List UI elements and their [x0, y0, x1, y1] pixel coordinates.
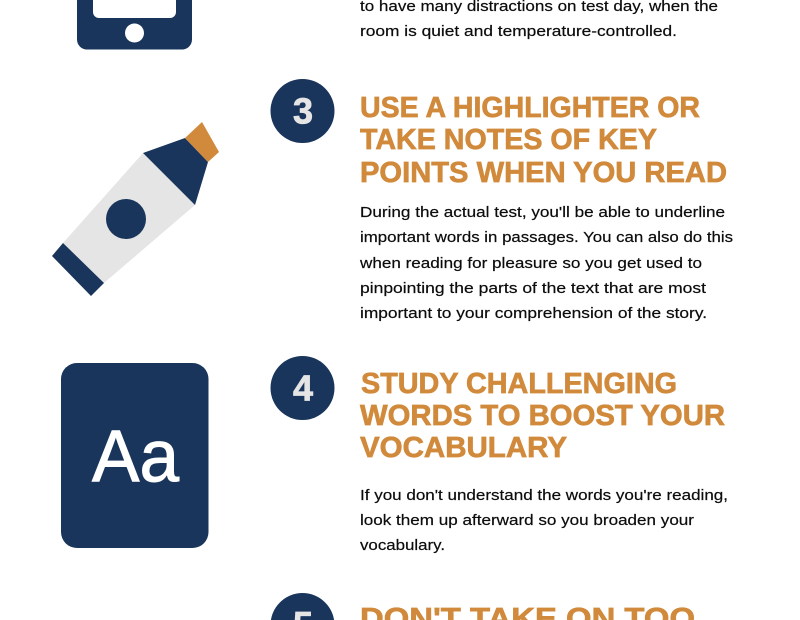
heading: tip 3: USE A HIGHLIGHTER OR: [360, 92, 700, 124]
badge: number 3: 3: [293, 90, 313, 132]
heading: tip 3: POINTS WHEN YOU READ: [360, 157, 727, 189]
icon: Aa card: [61, 363, 208, 548]
icon: highlighter: [52, 122, 219, 296]
heading: tip 3: [360, 92, 727, 189]
badge: number 5: [271, 593, 334, 620]
text: tip 3 body: pinpointing the parts of the text that are most: [360, 280, 707, 297]
heading: tip 3: TAKE NOTES OF KEY: [360, 124, 657, 156]
icon: Aa card: Aa: [92, 416, 179, 498]
panel: tip 5: [271, 593, 695, 620]
text: tip 3 body: During the actual test, you'll be able to underline: [360, 204, 725, 221]
text: tip 2 body: room is quiet and temperature-controlled.: [360, 23, 677, 40]
heading: tip 4: STUDY CHALLENGING: [361, 368, 677, 400]
heading: tip 4: VOCABULARY: [360, 432, 567, 464]
heading: tip 4: WORDS TO BOOST YOUR: [360, 400, 725, 432]
text: tip 4 body: [360, 487, 728, 554]
heading: tip 4: [360, 368, 725, 464]
text: tip 2 body: [360, 0, 718, 40]
badge: number 4: [270, 356, 334, 420]
icon: phone: [77, 0, 192, 50]
text: tip 3 body: [359, 204, 733, 322]
text: tip 3 body: important to your comprehension of the story.: [360, 305, 707, 322]
panel: tip 3: [52, 79, 733, 322]
text: tip 3 body: important words in passages. You can also do this: [360, 229, 733, 246]
panel: tip 2 remainder: [77, 0, 718, 50]
text: tip 4 body: If you don't understand the words you're reading,: [360, 487, 728, 504]
text: tip 4 body: look them up afterward so you broaden your: [360, 512, 694, 529]
text: tip 3 body: when reading for pleasure so you get used to: [359, 255, 702, 272]
badge: number 3: [270, 79, 334, 143]
panel: tip 4: [61, 356, 728, 554]
badge: number 4: 4: [293, 368, 313, 408]
text: tip 4 body: vocabulary.: [360, 537, 445, 554]
